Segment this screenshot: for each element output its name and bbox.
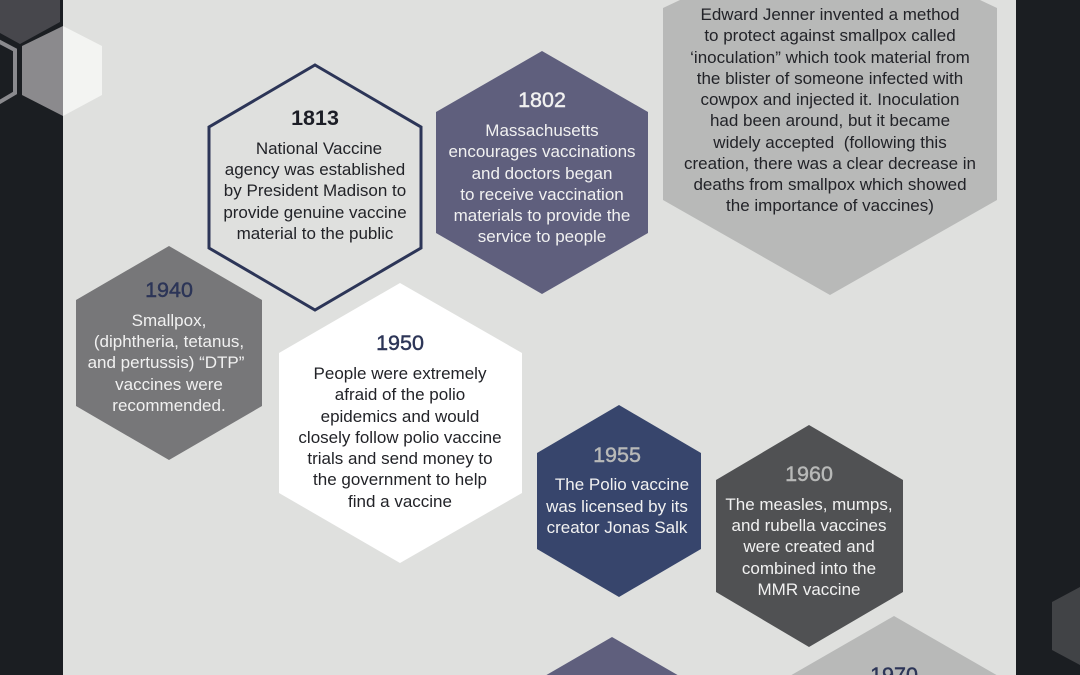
hexagon: 1940 (76, 246, 262, 460)
hexagon: 1940: (diphtheria, tetanus, (94, 332, 244, 351)
hexagon: Edward Jenner text: ‘inoculation” which took material from (690, 48, 970, 67)
hexagon: 1950: trials and send money to (307, 449, 493, 468)
hexagon: 1960: were created and (742, 537, 875, 556)
hexagon: 1950: the government to help (313, 470, 487, 489)
hexagon: 1813 (209, 65, 421, 310)
hexagon: 1960 (716, 425, 903, 647)
hexagon: 1955: was licensed by its (545, 497, 688, 516)
hexagon: Edward Jenner text: the blister of someone infected with (697, 69, 963, 88)
hexagon: 1802: materials to provide the (454, 206, 630, 225)
hexagon: 1950: afraid of the polio (335, 385, 465, 404)
hexagon: 1950: 1950 (376, 331, 424, 355)
hexagon: Edward Jenner text: to protect against smallpox called (704, 26, 956, 45)
hexagon: 1940: Smallpox, (132, 311, 206, 330)
hexagon: 1940: vaccines were (115, 375, 223, 394)
hexagon: Edward Jenner text: cowpox and injected it. Inoculation (701, 90, 959, 109)
hexagon: 1802: and doctors began (472, 164, 612, 183)
icon: right decorative hexagon (1052, 587, 1080, 665)
hexagon: 1950: People were extremely (314, 364, 487, 383)
hexagon: 1940: and pertussis) “DTP” (88, 353, 245, 372)
hexagon: 1950 (279, 283, 522, 563)
hexagon: 1960: and rubella vaccines (732, 516, 886, 535)
hexagon: 1813: by President Madison to (224, 181, 406, 200)
hexagon: Edward Jenner text: the importance of vaccines) (726, 196, 934, 215)
hexagon: 1960: MMR vaccine (758, 580, 860, 599)
hexagon: Edward Jenner text: widely accepted (following this (712, 133, 947, 152)
hexagon: Edward Jenner text: had been around, but it became (710, 111, 950, 130)
hexagon: 1960: 1960 (785, 462, 833, 486)
hexagon: 1950: find a vaccine (348, 492, 452, 511)
hexagon: 1940: 1940 (145, 278, 193, 302)
hexagon: 1955 (537, 405, 701, 597)
hexagon: Edward Jenner text: Edward Jenner invented a method (701, 5, 959, 24)
hexagon: 1955: creator Jonas Salk (547, 518, 688, 537)
hexagon: 1813: provide genuine vaccine (223, 203, 407, 222)
hexagon: 1960: The measles, mumps, (725, 495, 893, 514)
hexagon: 1960: combined into the (742, 559, 876, 578)
hexagon: 1940: recommended. (112, 396, 226, 415)
hexagon: 1950: closely follow polio vaccine (298, 428, 502, 447)
hexagon: bottom purple (543, 637, 681, 675)
hexagon: 1955: 1955 (593, 443, 641, 467)
hexagon: 1802 (436, 51, 648, 294)
icon: left decorative hexagons (0, 0, 102, 116)
hexagon: 1802: service to people (478, 227, 606, 246)
hexagon: Edward Jenner text (663, 0, 997, 295)
hexagon: 1970 (788, 616, 1000, 675)
hexagon: 1802: to receive vaccination (460, 185, 624, 204)
hexagon: 1802: 1802 (518, 88, 566, 112)
hexagon: 1813: 1813 (291, 106, 339, 130)
hexagon: 1813: agency was established (225, 160, 405, 179)
hexagon: 1802: encourages vaccinations (448, 142, 636, 161)
hexagon: 1802: Massachusetts (485, 121, 599, 140)
hexagon: 1813: material to the public (237, 224, 394, 243)
hexagon: 1955: The Polio vaccine (555, 475, 689, 494)
hexagon: 1950: epidemics and would (321, 407, 479, 426)
hexagon: Edward Jenner text: deaths from smallpox which showed (693, 175, 967, 194)
hexagon: 1813: National Vaccine (256, 139, 382, 158)
hexagon: Edward Jenner text: creation, there was a clear decrease in (684, 154, 976, 173)
